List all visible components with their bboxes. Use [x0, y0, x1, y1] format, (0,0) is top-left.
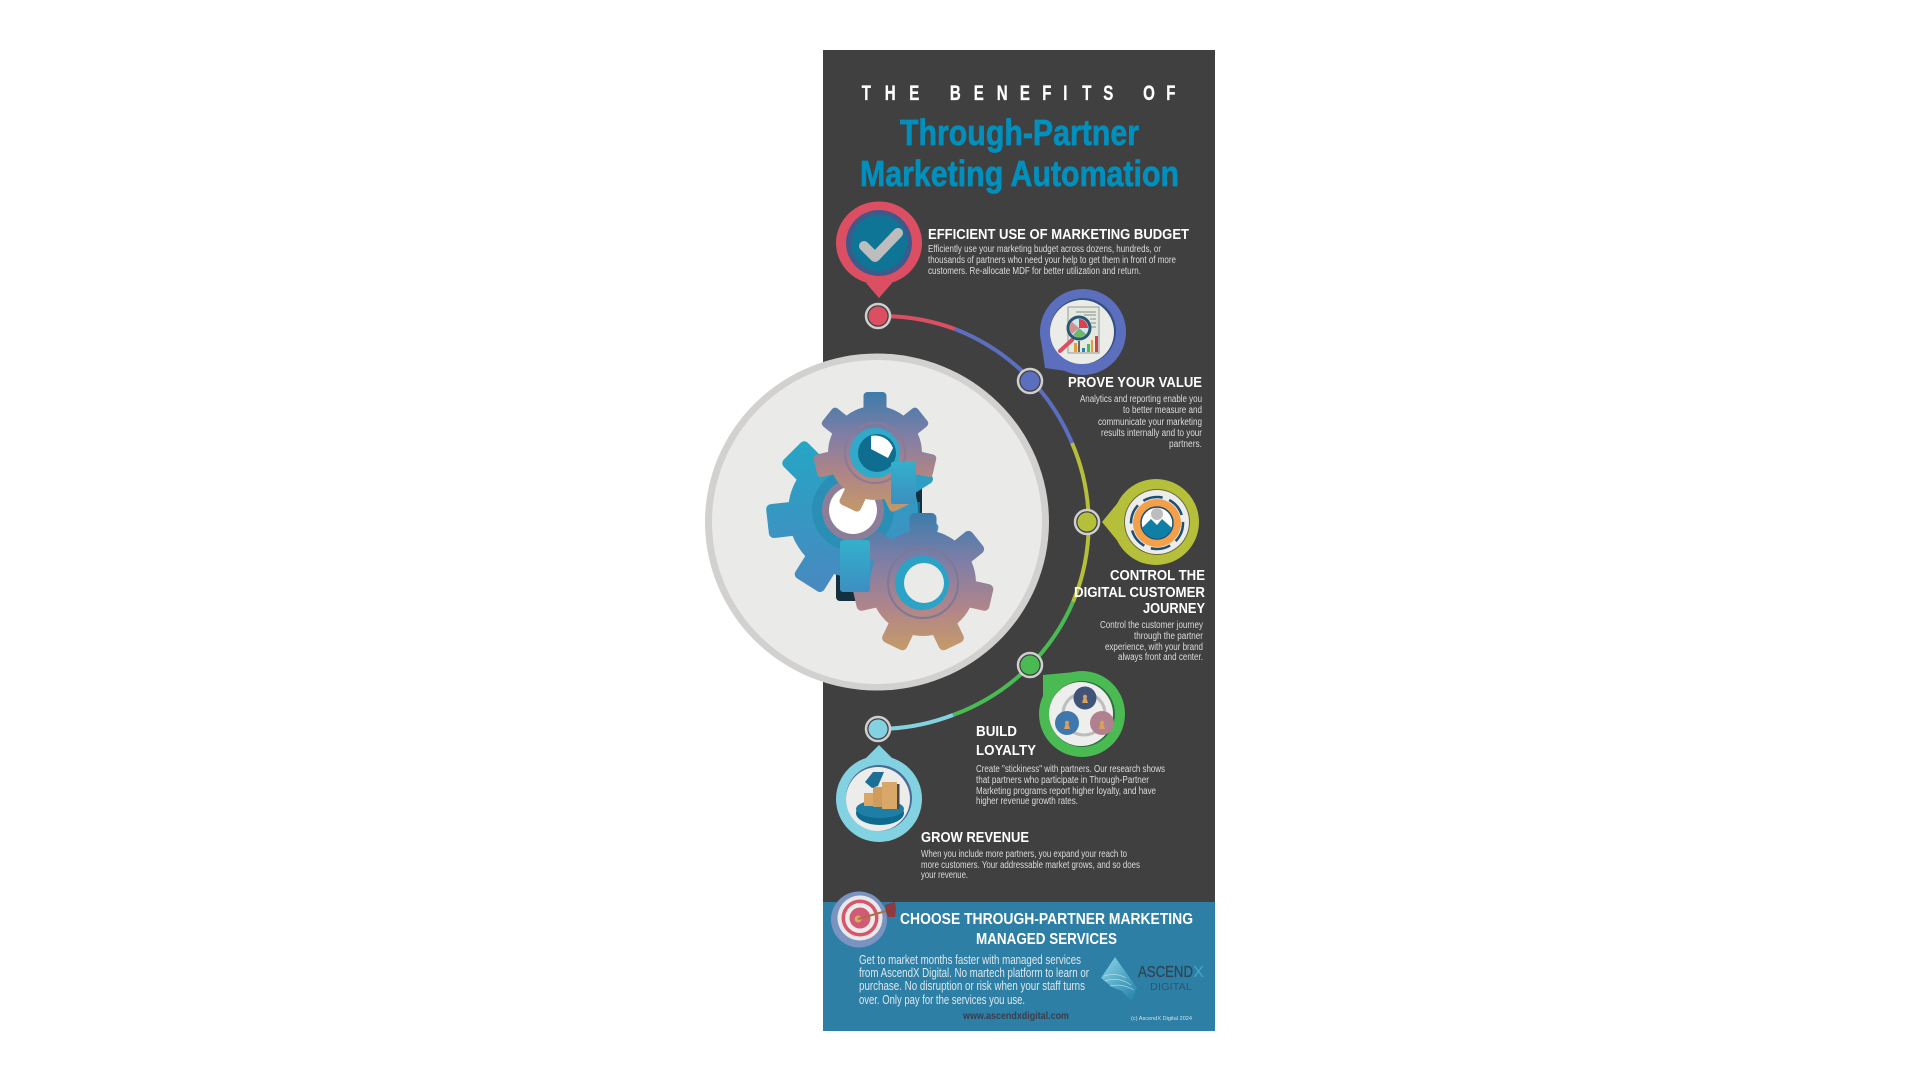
- text: managed services description: from AscendX Digital. No martech platform to learn or: [859, 966, 1089, 980]
- text: managed services description: over. Only pay for the services you use.: [859, 993, 1025, 1007]
- gears illustration: [760, 388, 996, 656]
- node: cyan: [866, 717, 890, 741]
- title: [860, 112, 1179, 194]
- title: Through-Partner: [900, 112, 1139, 153]
- heading: choose through-partner marketing managed services: [900, 911, 1193, 948]
- icon: customer journey pin: [1102, 479, 1199, 565]
- logo: ascendx digital: DIGITAL: [1150, 981, 1192, 993]
- text: build loyalty: that partners who participate in Through-Partner: [976, 775, 1150, 786]
- node: olive: [1075, 510, 1099, 534]
- heading: choose through-partner marketing managed services: MANAGED SERVICES: [976, 931, 1117, 948]
- text: build loyalty: BUILD: [976, 724, 1017, 740]
- heading: the benefits of: THE BENEFITS OF: [862, 80, 1175, 105]
- text: efficient use of marketing budget: Efficiently use your marketing budget across dozens, hundreds, or: [928, 244, 1162, 255]
- text: grow revenue: When you include more partners, you expand your reach to: [921, 849, 1127, 860]
- text: efficient use of marketing budget: thousands of partners who need your help to get them in front of more: [928, 255, 1176, 266]
- text: grow revenue: [921, 830, 1140, 881]
- node: green: [1018, 653, 1042, 677]
- copyright: (c) AscendX Digital 2024: [1131, 1016, 1192, 1022]
- text: prove your value: results internally and to your: [1101, 428, 1203, 439]
- panel: dark background: [823, 50, 1215, 1031]
- text: control the digital customer journey: experience, with your brand: [1105, 642, 1203, 653]
- text: managed services description: Get to market months faster with managed services: [859, 953, 1081, 967]
- text: prove your value: PROVE YOUR VALUE: [1068, 375, 1202, 391]
- text: prove your value: partners.: [1169, 439, 1202, 450]
- infographic: [705, 50, 1215, 1031]
- logo: ascendx digital: ASCEND: [1138, 964, 1193, 981]
- text: build loyalty: higher revenue growth rates.: [976, 796, 1078, 807]
- text: prove your value: to better measure and: [1123, 405, 1202, 416]
- text: build loyalty: Marketing programs report higher loyalty, and have: [976, 786, 1156, 797]
- node: blue: [1018, 369, 1042, 393]
- icon: analytics pin: [1040, 289, 1126, 375]
- text: build loyalty: LOYALTY: [976, 743, 1036, 759]
- text: build loyalty: Create "stickiness" with partners. Our research shows: [976, 764, 1165, 775]
- node: red: [866, 304, 890, 328]
- text: grow revenue: more customers. Your addressable market grows, and so does: [921, 860, 1140, 871]
- text: control the digital customer journey: DIGITAL CUSTOMER: [1074, 585, 1205, 601]
- text: control the digital customer journey: always front and center.: [1118, 652, 1203, 663]
- icon: revenue pin: [836, 745, 922, 842]
- text: control the digital customer journey: Control the customer journey: [1100, 620, 1203, 631]
- icon: target with arrow: [831, 892, 896, 948]
- panel: managed services band: [823, 902, 1215, 1031]
- text: control the digital customer journey: [1074, 568, 1205, 663]
- text: control the digital customer journey: through the partner: [1134, 631, 1204, 642]
- text: managed services description: purchase. No disruption or risk when your staff turns: [859, 979, 1085, 993]
- icon: loyalty pin: [1039, 671, 1125, 757]
- timeline arc: [878, 316, 1089, 729]
- title: Marketing Automation: [860, 153, 1179, 194]
- icon: check mark pin: [836, 202, 922, 298]
- text: prove your value: Analytics and reporting enable you: [1080, 394, 1202, 405]
- text: efficient use of marketing budget: [928, 227, 1189, 277]
- text: grow revenue: GROW REVENUE: [921, 830, 1029, 846]
- text: build loyalty: [976, 724, 1165, 807]
- website url: www.ascendxdigital.com: [962, 1011, 1069, 1022]
- text: efficient use of marketing budget: customers. Re-allocate MDF for better utilization and return.: [928, 266, 1141, 277]
- logo: ascendx digital: [1101, 957, 1205, 1002]
- text: efficient use of marketing budget: EFFICIENT USE OF MARKETING BUDGET: [928, 227, 1189, 243]
- text: prove your value: [1068, 375, 1203, 450]
- big circle with gears: [705, 354, 1049, 690]
- text: control the digital customer journey: CONTROL THE: [1110, 568, 1205, 584]
- text: control the digital customer journey: JOURNEY: [1143, 601, 1205, 617]
- heading: choose through-partner marketing managed services: CHOOSE THROUGH-PARTNER MARKETING: [900, 911, 1193, 928]
- text: managed services description: [859, 953, 1089, 1007]
- text: grow revenue: your revenue.: [921, 870, 968, 881]
- logo: ascendx digital: X: [1193, 964, 1205, 981]
- text: prove your value: communicate your marketing: [1098, 417, 1202, 428]
